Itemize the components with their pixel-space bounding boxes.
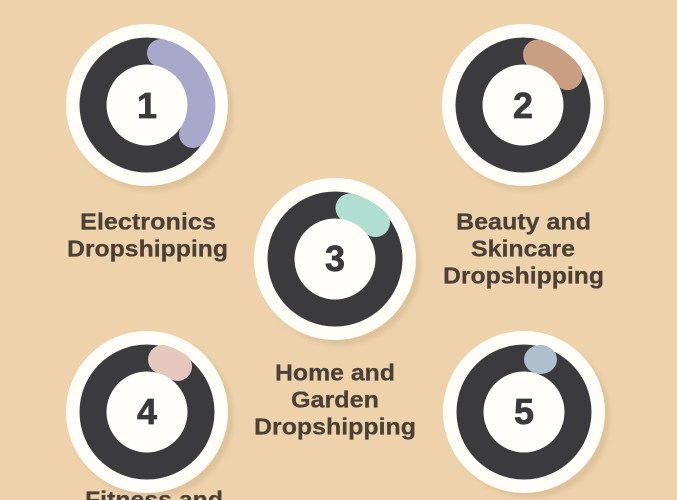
dial 2 [442, 24, 609, 191]
progress arc 3 [350, 208, 376, 222]
label 2: Dropshipping [443, 262, 604, 288]
item 2: Beauty and Skincare Dropshipping [442, 24, 609, 288]
number 4: 4 [137, 391, 157, 432]
label 3: Home and [275, 360, 395, 386]
item 5 dial [443, 331, 610, 498]
label 3: Garden [291, 386, 379, 412]
number 3: 3 [325, 238, 345, 279]
dial 1 [66, 24, 233, 191]
number 5: 5 [514, 391, 534, 432]
progress arc 2 [538, 54, 568, 75]
label 2 [443, 208, 604, 288]
label 1 [67, 208, 228, 262]
label 3: Dropshipping [254, 414, 416, 440]
progress arc 1 [161, 53, 201, 134]
item 3: Home and Garden Dropshipping [254, 178, 421, 440]
dial 4 [66, 331, 233, 498]
label 2: Beauty and [456, 208, 591, 234]
label 1: Electronics [80, 208, 216, 234]
label 1: Dropshipping [67, 236, 228, 262]
item 4: Fitness and [66, 331, 233, 500]
item 1: Electronics Dropshipping [66, 24, 233, 262]
dial 3 [254, 178, 421, 345]
number 1: 1 [137, 85, 157, 126]
progress blob 5 [524, 345, 557, 374]
label 3 [254, 360, 416, 440]
progress arc 4 [162, 360, 178, 366]
number 2: 2 [513, 85, 533, 126]
label 2: Skincare [471, 236, 575, 262]
